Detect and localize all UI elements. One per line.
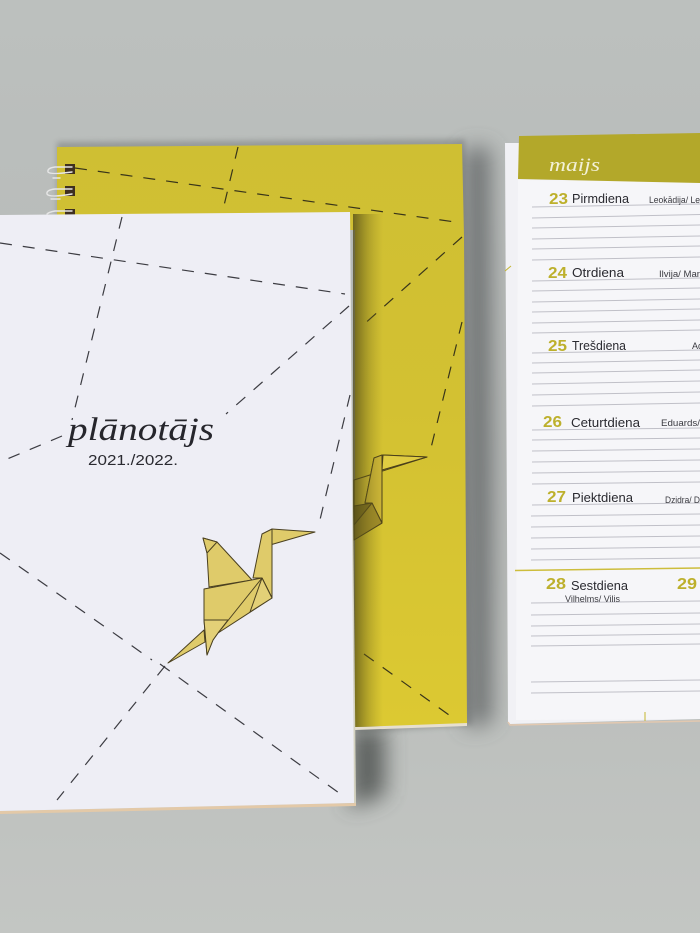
day 25: 25	[548, 338, 567, 355]
day 24	[548, 265, 700, 282]
yellow back notebook	[47, 144, 467, 730]
page tick marks	[505, 266, 645, 721]
surface shadows	[57, 139, 492, 808]
origami crane on yellow cover	[354, 455, 427, 540]
cover cast shadow on yellow	[353, 214, 383, 727]
day 23	[549, 191, 700, 208]
right planner: weekly spread	[505, 133, 700, 725]
cover sheet	[0, 212, 354, 811]
day 26	[543, 414, 700, 431]
day 27	[547, 489, 700, 506]
day 27: Piektdiena	[572, 490, 634, 505]
ruled lines	[531, 204, 700, 693]
day 23: Pirmdiena	[572, 191, 630, 206]
day 24: Ilvija/ Mar	[659, 269, 700, 279]
month header band	[518, 133, 700, 183]
day 28: 28	[546, 576, 566, 593]
day 26: 26	[543, 414, 562, 431]
month name: maijs	[549, 155, 600, 176]
day 26: Ceturtdiena	[571, 415, 641, 430]
day 25: Trešdiena	[572, 338, 627, 353]
title: plānotājs: plānotājs	[66, 412, 214, 448]
outer page stack	[505, 140, 700, 724]
day 24: 24	[548, 265, 567, 282]
notebook cover	[57, 144, 467, 727]
dashed fold lines on yellow cover	[75, 147, 462, 720]
notebook page edge	[355, 720, 467, 730]
day 25	[548, 338, 700, 355]
day 28: Vilhelms/ Vilis	[565, 594, 620, 604]
year label: 2021./2022.	[88, 453, 178, 469]
day 24: Otrdiena	[572, 265, 625, 280]
day 23: 23	[549, 191, 568, 208]
day 27: 27	[547, 489, 566, 506]
origami crane on white cover	[168, 529, 315, 663]
day 28: Sestdiena	[571, 578, 629, 593]
spiral binding	[47, 164, 75, 215]
dashed fold lines on white cover	[0, 217, 350, 800]
weekend divider	[515, 568, 700, 570]
day 26: Eduards/	[661, 418, 700, 428]
cover edge	[0, 803, 356, 814]
day 29: 29	[677, 576, 697, 593]
front white cover	[0, 212, 356, 814]
day 28	[546, 576, 629, 604]
inner page	[516, 180, 700, 720]
